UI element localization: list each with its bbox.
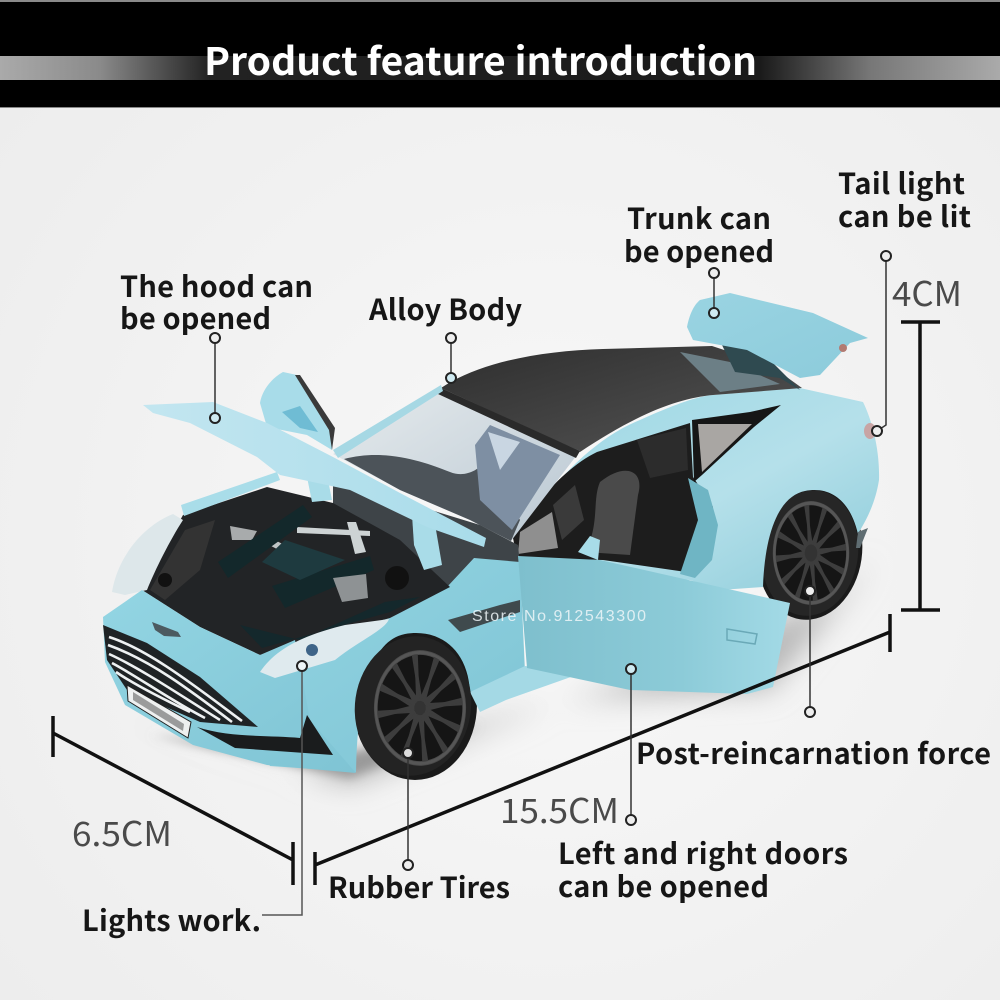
callout: trunk: Trunk can <box>627 196 771 238</box>
callout: rear wheel <box>636 586 991 773</box>
seat and dash <box>518 428 688 555</box>
nose <box>103 590 356 773</box>
title: Product feature introduction <box>204 31 757 86</box>
label: 6.5CM: 6.5CM <box>72 807 172 856</box>
roof <box>441 346 802 452</box>
engine details <box>150 505 420 648</box>
sill <box>470 666 585 712</box>
label: 4CM: 4CM <box>892 267 962 316</box>
interior opening <box>513 423 713 573</box>
callout: doors <box>558 664 848 906</box>
callout: tires <box>328 748 510 907</box>
number plate <box>127 685 191 738</box>
side vent <box>448 600 520 632</box>
door top lock <box>578 536 600 560</box>
door jamb <box>680 478 718 578</box>
rear tyre <box>754 484 866 622</box>
right headlamp <box>260 619 389 678</box>
front tyre <box>346 629 480 783</box>
dimension: height 4CM <box>901 322 940 610</box>
callout: alloy body: Alloy Body <box>368 287 522 329</box>
cabin interior seen through glass <box>344 425 560 541</box>
logo <box>152 622 181 637</box>
callout: tires: Rubber Tires <box>328 865 510 907</box>
door handle <box>727 629 757 644</box>
rear quarter window <box>692 405 781 482</box>
callout: hood <box>120 264 313 423</box>
front fender <box>230 558 525 772</box>
rear wheel rim <box>768 494 854 612</box>
callout: rear wheel: Post-reincarnation force <box>636 731 991 773</box>
grille <box>103 625 258 727</box>
callout: tail light: Tail light <box>838 161 965 203</box>
callout: doors: can be opened <box>558 864 769 906</box>
callout: trunk <box>624 196 774 318</box>
a-pillar <box>333 385 443 458</box>
hood rim strip <box>181 472 280 516</box>
lower intake <box>197 715 333 755</box>
watermark: Store No.912543300 <box>472 608 646 625</box>
callout: lights: Lights work. <box>82 898 261 940</box>
car shadow <box>120 560 875 785</box>
trunk lid <box>687 293 868 390</box>
rear bumper tip <box>856 528 868 548</box>
callout: tail light: can be lit <box>838 194 971 236</box>
far headlamp <box>112 514 183 595</box>
wheel wells <box>353 477 871 780</box>
label: 15.5CM: 15.5CM <box>500 784 619 833</box>
callout: doors: Left and right doors <box>558 831 848 873</box>
header banner <box>0 0 1000 108</box>
open hood <box>143 402 486 547</box>
rear body <box>513 388 879 590</box>
far door <box>260 372 335 450</box>
callout: alloy body <box>368 287 522 383</box>
tail light <box>864 423 876 439</box>
cowl under hood <box>333 480 520 590</box>
hood struts <box>306 470 442 570</box>
toy car <box>103 293 879 783</box>
rear deck detail <box>680 352 780 392</box>
callout: hood: The hood can <box>120 264 313 306</box>
windshield <box>333 390 580 541</box>
front wheel rim <box>368 643 472 773</box>
callout: lights <box>82 661 307 940</box>
engine bay <box>142 487 450 655</box>
callout: tail light <box>838 161 971 436</box>
callout: trunk: be opened <box>624 229 774 271</box>
open door <box>518 556 790 694</box>
dimension: length 15.5CM <box>315 614 890 885</box>
dimension: width 6.5CM <box>53 716 293 885</box>
callout: hood: be opened <box>120 296 271 338</box>
